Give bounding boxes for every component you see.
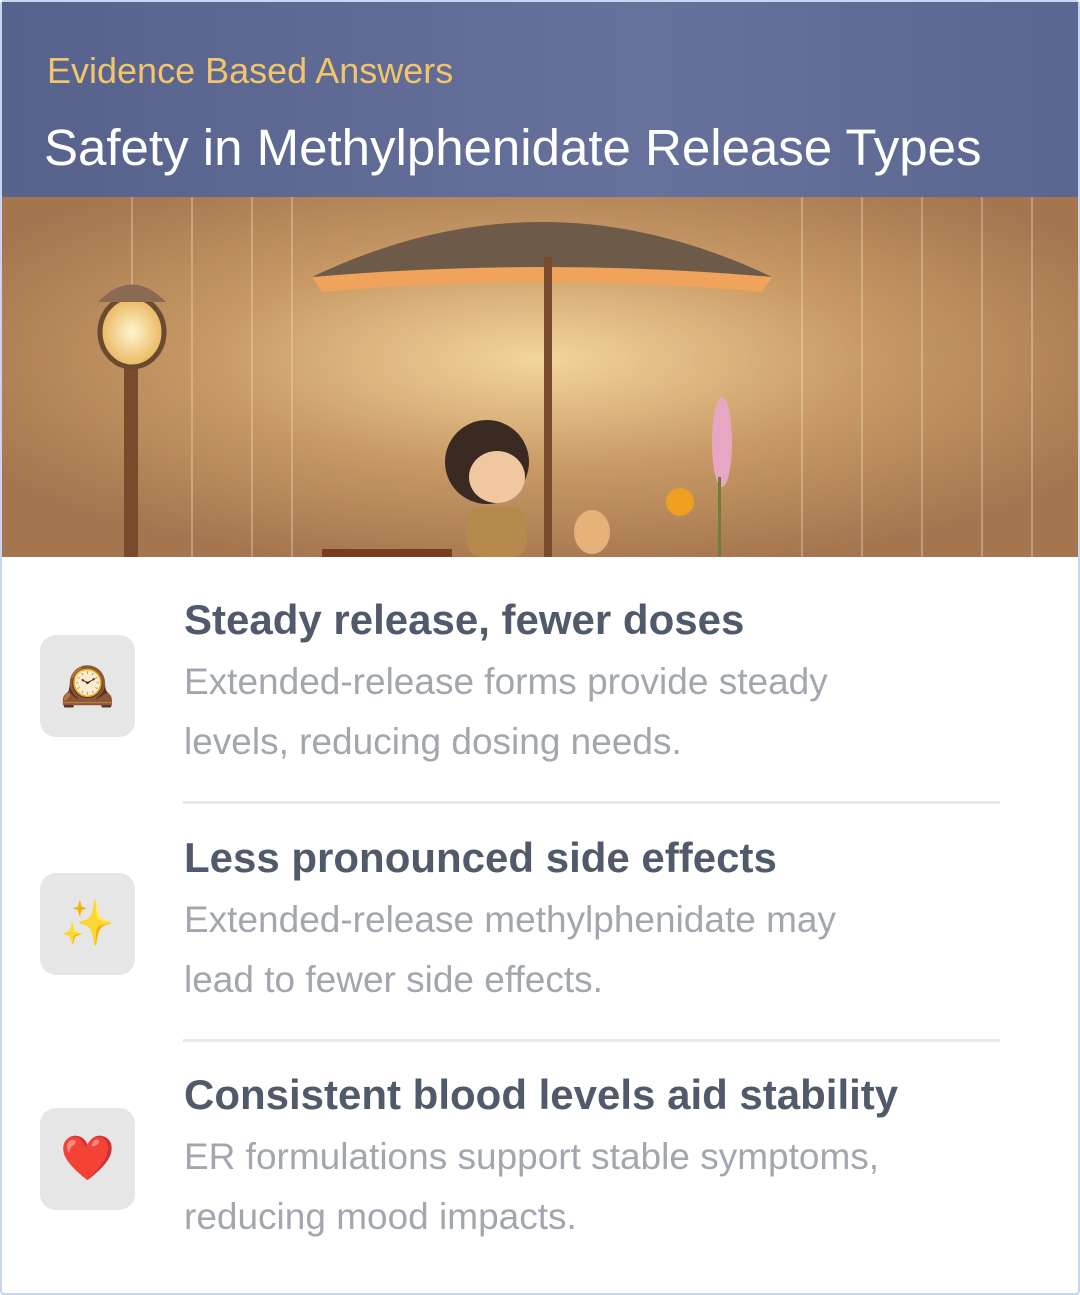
text 3: reducing mood impacts. (184, 1196, 577, 1237)
text 1: levels, reducing dosing needs. (184, 721, 682, 762)
flowers (322, 397, 732, 557)
heading 1: Steady release, fewer doses (184, 596, 744, 643)
icon: sparkles (40, 873, 135, 975)
icon: heart (40, 1108, 135, 1210)
header (2, 2, 1078, 197)
text 3 (184, 1136, 879, 1237)
item 3 (40, 1071, 898, 1237)
kicker: Evidence Based Answers (47, 50, 453, 91)
icon: clock: 🕰️ (60, 661, 115, 710)
icon: heart: ❤️ (60, 1134, 115, 1183)
child (445, 420, 610, 557)
icon: sparkles: ✨ (60, 899, 115, 948)
text 3: ER formulations support stable symptoms, (184, 1136, 879, 1177)
icon: clock (40, 635, 135, 737)
item 1 (40, 596, 828, 762)
item 2 (40, 834, 836, 1000)
lamp post (98, 284, 166, 557)
text 2: Extended-release methylphenidate may (184, 899, 836, 940)
text 1: Extended-release forms provide steady (184, 661, 828, 702)
umbrella (312, 222, 772, 557)
text 2 (184, 899, 836, 1000)
text 1 (184, 661, 828, 762)
heading 3: Consistent blood levels aid stability (184, 1071, 898, 1118)
hero illustration (2, 197, 1078, 557)
title: Safety in Methylphenidate Release Types (44, 119, 981, 176)
text 2: lead to fewer side effects. (184, 959, 603, 1000)
heading 2: Less pronounced side effects (184, 834, 777, 881)
